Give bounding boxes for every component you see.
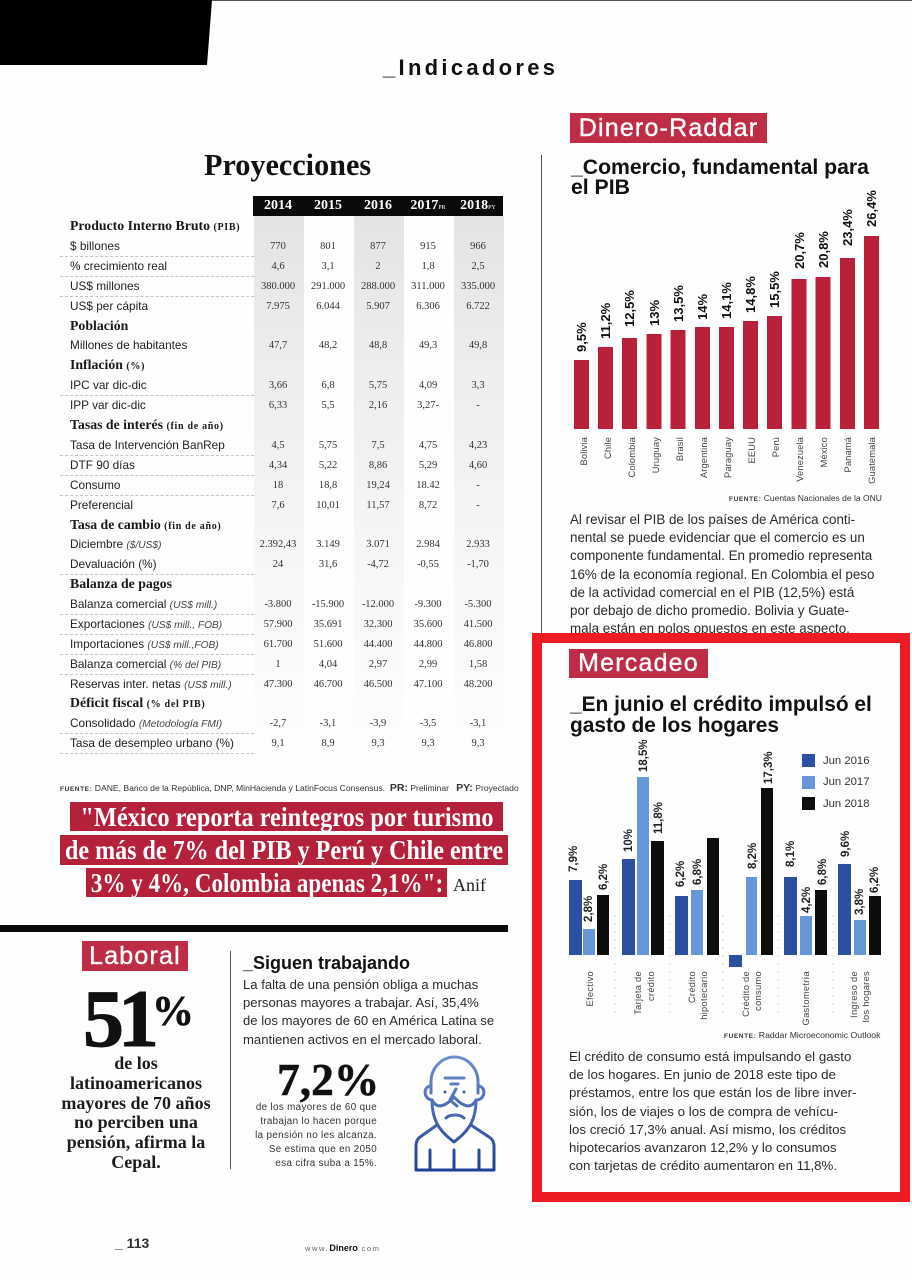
grouped bar chart: household spending: 2,8% xyxy=(583,896,595,922)
panel: projections table: 3.071 xyxy=(366,539,390,550)
panel: projections table: 6.722 xyxy=(466,301,490,312)
panel: projections table: 18,8 xyxy=(319,480,337,491)
text: commerce paragraph: nental se puede evidenciar que el comercio es un xyxy=(570,530,865,545)
panel: projections table: 877 xyxy=(370,241,386,252)
panel: projections table: 32.300 xyxy=(364,619,392,630)
bar chart: commerce share of GDP: 14,8% xyxy=(743,276,758,313)
text: credit paragraph: préstamos, entre los que están los de libre inver- xyxy=(569,1085,857,1100)
panel: projections table: Inflación (%) xyxy=(70,357,145,372)
bar chart: commerce share of GDP: 20,7% xyxy=(792,232,807,269)
chart legend: Jun 2017 xyxy=(823,776,869,788)
text: pension statement xyxy=(61,1053,211,1172)
bar chart: commerce share of GDP: 13% xyxy=(647,300,662,326)
panel: projections table: 7,6 xyxy=(271,500,285,511)
table source note: FUENTE: DANE, Banco de la República, DNP, MinHacienda y LatinFocus Consensus. PR: Preliminar PY: Proyectado xyxy=(60,782,519,794)
table header years: 2015 xyxy=(314,198,342,213)
bar chart: commerce share of GDP: Guatemala xyxy=(867,436,877,484)
bar chart: commerce share of GDP: Colombia xyxy=(627,436,637,477)
panel: projections table: 1,58 xyxy=(469,659,487,670)
grouped bar chart: household spending: 6,8% xyxy=(817,859,829,885)
bar chart: commerce share of GDP: 15,5% xyxy=(767,271,782,308)
table header years: 2016 xyxy=(364,198,392,213)
panel: projections table: 3,1 xyxy=(321,261,335,272)
panel: projections table: 4,34 xyxy=(269,460,287,471)
bar chart: commerce share of GDP: 20,8% xyxy=(816,231,831,268)
panel: projections table: 6,8 xyxy=(321,380,335,391)
panel: projections table: US$ millones xyxy=(70,279,140,293)
panel: projections table: 6.044 xyxy=(316,301,340,312)
text: 7,2% detail: esa cifra suba a 15%. xyxy=(275,1158,377,1169)
grouped bar chart: household spending: los hogares xyxy=(861,971,871,1022)
panel: projections table: 35.600 xyxy=(414,619,442,630)
panel: projections table: 18 xyxy=(273,480,283,491)
heading: Siguen trabajando: _Siguen trabajando xyxy=(243,953,410,973)
panel: projections table: 6,33 xyxy=(269,400,287,411)
panel: projections table: Exportaciones (US$ mill., FOB) xyxy=(70,617,222,631)
panel: projections table: 4,5 xyxy=(271,440,285,451)
panel: projections table: Preferencial xyxy=(70,498,133,512)
panel: projections table: 3,66 xyxy=(269,380,287,391)
panel: projections table: 2,99 xyxy=(419,659,437,670)
grouped bar chart: household spending: hipotecario xyxy=(699,971,709,1020)
website footer: www.Dinero.com xyxy=(305,1243,380,1253)
panel: projections table: Déficit fiscal (% del PIB) xyxy=(70,695,205,710)
panel: projections table: 31,6 xyxy=(319,559,337,570)
panel: projections table: 48,2 xyxy=(319,340,337,351)
text: 7,2% detail: de los mayores de 60 que xyxy=(256,1102,377,1113)
bar chart: commerce share of GDP xyxy=(574,190,879,484)
grouped bar chart: household spending: Efectivo xyxy=(585,971,595,1006)
big stat: 7,2%: 7,2% xyxy=(277,1054,379,1105)
grouped bar chart: household spending: consumo xyxy=(753,971,763,1011)
panel: projections table: 4,04 xyxy=(319,659,337,670)
panel: projections table: 61.700 xyxy=(264,639,292,650)
text: credit paragraph: con tarjetas de crédito aumentaron en 11,8%. xyxy=(569,1158,837,1173)
bar chart: commerce share of GDP: 14% xyxy=(695,294,710,320)
bar chart: commerce share of GDP: Venezuela xyxy=(795,436,805,482)
panel: projections table: 4,60 xyxy=(469,460,487,471)
panel: projections table: 9,1 xyxy=(271,738,285,749)
panel: projections table: Producto Interno Bruto (PIB) xyxy=(70,218,240,233)
bar chart: commerce share of GDP: México xyxy=(819,437,829,467)
section title: Indicadores: _Indicadores xyxy=(383,55,558,80)
panel: projections table: - xyxy=(476,480,480,491)
panel: projections table: -3.800 xyxy=(264,599,292,610)
panel: projections table: 5,5 xyxy=(321,400,335,411)
panel: projections table: 2.984 xyxy=(416,539,440,550)
panel: projections table: Devaluación (%) xyxy=(70,557,157,571)
panel: projections table: 801 xyxy=(320,241,336,252)
text: credit paragraph: los creció 17,3% anual. Así mismo, los créditos xyxy=(569,1122,846,1137)
panel: projections table: 2,5 xyxy=(471,261,485,272)
text: commerce paragraph: componente fundamental. En promedio representa xyxy=(570,548,872,563)
text: pension statement: de los xyxy=(114,1053,158,1073)
bar chart: commerce share of GDP: EEUU xyxy=(747,437,757,463)
grouped bar chart: household spending: 11,8% xyxy=(653,802,665,834)
text: 7,2% detail: la pensión no les alcanza. xyxy=(255,1130,377,1141)
panel: projections table: -3,1 xyxy=(470,718,486,729)
chart legend: Jun 2018 xyxy=(823,798,869,810)
panel: projections table: 8,72 xyxy=(419,500,437,511)
pull quote: Anif xyxy=(453,875,486,895)
heading: Proyecciones: Proyecciones xyxy=(204,148,371,182)
bar chart: commerce share of GDP: 26,4% xyxy=(864,190,879,227)
panel: projections table: -3,9 xyxy=(370,718,386,729)
panel: projections table: US$ per cápita xyxy=(70,299,148,313)
grouped bar chart: household spending: 8,2% xyxy=(747,843,759,869)
panel: projections table: 2.392,43 xyxy=(260,539,296,550)
panel: projections table: -5.300 xyxy=(464,599,492,610)
table header years xyxy=(253,196,503,216)
heading: Comercio: _Comercio, fundamental para xyxy=(571,156,869,179)
grouped bar chart: household spending: 6,2% xyxy=(675,861,687,887)
grouped bar chart: household spending: 6,2% xyxy=(869,867,881,893)
tag: Mercadeo: Mercadeo xyxy=(578,649,699,677)
panel: projections table: Tasa de desempleo urbano (%) xyxy=(70,736,234,750)
panel: projections table: -2,7 xyxy=(270,718,286,729)
grouped bar chart: household spending: Crédito xyxy=(687,971,697,1003)
text: Siguen trabajando body: La falta de una pensión obliga a muchas xyxy=(243,977,478,992)
panel: projections table: 10,01 xyxy=(316,500,340,511)
panel: projections table: 47,7 xyxy=(269,340,287,351)
bar chart: commerce share of GDP: Chile xyxy=(603,437,613,459)
bar chart: commerce share of GDP: Paraguay xyxy=(723,437,733,478)
bar chart: commerce share of GDP: 23,4% xyxy=(840,209,855,246)
text: credit paragraph: sión, los de viajes o los de compra de vehícu- xyxy=(569,1104,838,1119)
panel: projections table: Balanza de pagos xyxy=(70,576,172,591)
grouped bar chart: household spending: 6,2% xyxy=(598,864,610,890)
grouped bar chart: household spending: 4,2% xyxy=(801,887,813,913)
panel: projections table: IPC var dic-dic xyxy=(70,378,147,392)
panel: projections table: 57.900 xyxy=(264,619,292,630)
panel: projections table: 291.000 xyxy=(311,281,345,292)
panel: projections table: Población xyxy=(70,318,128,333)
panel: projections table: 915 xyxy=(420,241,436,252)
panel: projections table: Tasa de Intervención BanRep xyxy=(70,438,225,452)
panel: projections table: 7,5 xyxy=(371,440,385,451)
grouped bar chart: household spending: 8,1% xyxy=(785,841,797,867)
bar chart: commerce share of GDP: 9,5% xyxy=(574,322,589,352)
text: commerce paragraph: 16% de la economía regional. En Colombia el peso xyxy=(570,567,874,582)
bar chart: commerce share of GDP: Panamá xyxy=(843,436,853,473)
chart legend: Jun 2016 xyxy=(823,755,869,767)
big stat: 51%: 51 xyxy=(83,973,153,1064)
panel: projections table: Reservas inter. netas (US$ mill.) xyxy=(70,677,232,691)
panel: projections table: -1,70 xyxy=(467,559,489,570)
table header years: 2017PR xyxy=(410,198,446,213)
panel: projections table: Balanza comercial (US$ mill.) xyxy=(70,597,217,611)
grouped bar chart: household spending: 10% xyxy=(623,829,635,852)
panel: projections table: 47.300 xyxy=(264,679,292,690)
panel: projections table: 966 xyxy=(470,241,486,252)
bar chart: commerce share of GDP: Bolivia xyxy=(579,436,589,465)
section divider xyxy=(0,925,508,932)
page number: _ 113 xyxy=(115,1235,149,1251)
heading: credit: gasto de los hogares xyxy=(570,714,779,736)
grouped bar chart: household spending: 9,6% xyxy=(840,831,852,857)
chart legend xyxy=(802,754,869,810)
panel: projections table: 335.000 xyxy=(461,281,495,292)
panel: projections table: 4,09 xyxy=(419,380,437,391)
text: commerce paragraph xyxy=(570,512,874,636)
panel: projections table: 3,3 xyxy=(471,380,485,391)
bar chart: commerce share of GDP: Perú xyxy=(771,437,781,457)
panel: projections table: 18.42 xyxy=(416,480,440,491)
bar chart: commerce share of GDP: 11,2% xyxy=(598,302,613,339)
panel: projections table: DTF 90 días xyxy=(70,458,135,472)
text: credit paragraph: de los hogares. En junio de 2018 este tipo de xyxy=(569,1067,836,1082)
panel: projections table: 4,23 xyxy=(469,440,487,451)
panel: projections table: -4,72 xyxy=(367,559,389,570)
grouped bar chart: household spending: 17,3% xyxy=(763,751,775,784)
table header years: 2014 xyxy=(264,198,292,213)
panel: projections table: Millones de habitantes xyxy=(70,338,187,352)
panel: projections table: 19,24 xyxy=(366,480,390,491)
text: Siguen trabajando body: de los mayores de 60 en América Latina se xyxy=(243,1013,494,1028)
panel: projections table: 4,75 xyxy=(419,440,437,451)
panel: projections table: 41.500 xyxy=(464,619,492,630)
panel: projections table: 5,75 xyxy=(319,440,337,451)
grouped bar chart: household spending: 3,8% xyxy=(854,889,866,915)
grouped bar chart: household spending: crédito xyxy=(646,971,656,1001)
bar chart: commerce share of GDP: 14,1% xyxy=(719,282,734,319)
grouped bar chart: household spending: 18,5% xyxy=(638,740,650,772)
grouped bar chart: household spending: Gastometría xyxy=(801,970,811,1025)
text: pension statement: pensión, afirma la xyxy=(67,1132,205,1152)
grouped bar chart: household spending: Ingreso de xyxy=(849,971,859,1018)
panel: projections table: 5,22 xyxy=(319,460,337,471)
text: Siguen trabajando body: personas mayores a trabajar. Así, 35,4% xyxy=(243,995,479,1010)
panel divider xyxy=(541,155,542,633)
panel: projections table: Tasa de cambio (fin de año) xyxy=(70,517,221,532)
panel: projections table: -3,5 xyxy=(420,718,436,729)
big stat: 51%: % xyxy=(152,989,194,1035)
panel: projections table: 35.691 xyxy=(314,619,342,630)
text: 7,2% detail: trabajan lo hacen porque xyxy=(260,1116,377,1127)
text: commerce paragraph: de la actividad comercial en el PIB (12,5%) está xyxy=(570,585,854,600)
panel: projections table: % crecimiento real xyxy=(70,259,167,273)
panel: projections table: 288.000 xyxy=(361,281,395,292)
panel: projections table: 51.600 xyxy=(314,639,342,650)
panel: projections table: 46.700 xyxy=(314,679,342,690)
panel: projections table: 49,8 xyxy=(469,340,487,351)
panel: projections table: 9,3 xyxy=(421,738,435,749)
pull quote xyxy=(60,802,508,897)
tag: Laboral: Laboral xyxy=(89,942,181,970)
text: 7,2% detail xyxy=(255,1102,377,1169)
panel: projections table: 311.000 xyxy=(411,281,445,292)
panel: projections table: 1,8 xyxy=(421,261,435,272)
black corner shape xyxy=(0,0,912,65)
chart source: Raddar: FUENTE: Raddar Microeconomic Outlook xyxy=(724,1030,880,1040)
bar chart: commerce share of GDP: Argentina xyxy=(699,436,709,478)
panel: projections table: 4,6 xyxy=(271,261,285,272)
panel: projections table: Balanza comercial (% del PIB) xyxy=(70,657,221,671)
heading: credit: _En junio el crédito impulsó el xyxy=(570,693,872,716)
heading: Comercio: el PIB xyxy=(571,176,630,198)
text: commerce paragraph: mala están en polos opuestos en este aspecto. xyxy=(570,621,850,636)
panel: projections table: 380.000 xyxy=(261,281,295,292)
big stat: 51% xyxy=(83,973,194,1064)
panel: projections table: 5,75 xyxy=(369,380,387,391)
panel: projections table: 9,3 xyxy=(471,738,485,749)
panel: projections table: Importaciones (US$ mill.,FOB) xyxy=(70,637,219,651)
panel: projections table: Tasas de interés (fin de año) xyxy=(70,417,224,432)
panel: projections table: - xyxy=(476,500,480,511)
text: pension statement: latinoamericanos xyxy=(70,1073,202,1093)
text: pension statement: mayores de 70 años xyxy=(61,1093,211,1113)
bar chart: commerce share of GDP: Uruguay xyxy=(651,437,661,473)
panel: projections table: 5,29 xyxy=(419,460,437,471)
panel: projections table: -9.300 xyxy=(414,599,442,610)
panel: projections table: $ billones xyxy=(70,239,120,253)
column divider xyxy=(230,951,231,1169)
panel: projections table: 24 xyxy=(273,559,283,570)
panel: projections table: 48.200 xyxy=(464,679,492,690)
panel: projections table: Consumo xyxy=(70,478,120,492)
bar chart: commerce share of GDP: 13,5% xyxy=(671,285,686,322)
panel: projections table: 770 xyxy=(270,241,286,252)
grouped bar chart: household spending: Tarjeta de xyxy=(633,971,643,1015)
panel: projections table: 48,8 xyxy=(369,340,387,351)
panel: projections table: -0,55 xyxy=(417,559,439,570)
grouped bar chart: household spending xyxy=(568,740,881,1025)
text: credit paragraph: El crédito de consumo está impulsando el gasto xyxy=(569,1049,851,1064)
panel: projections table: - xyxy=(476,400,480,411)
panel: projections table: -3,1 xyxy=(320,718,336,729)
text: pension statement: Cepal. xyxy=(111,1152,161,1172)
text: Siguen trabajando body xyxy=(243,977,494,1047)
panel: projections table: 47.100 xyxy=(414,679,442,690)
panel: projections table: 44.400 xyxy=(364,639,392,650)
panel: projections table: 7.975 xyxy=(266,301,290,312)
text: commerce paragraph: Al revisar el PIB de los países de América conti- xyxy=(570,512,855,527)
text: credit paragraph xyxy=(569,1049,857,1173)
panel: projections table: 6.306 xyxy=(416,301,440,312)
bar chart: commerce share of GDP: Brasil xyxy=(675,437,685,461)
panel: projections table: 3,27- xyxy=(417,400,439,411)
grouped bar chart: household spending: Crédito de xyxy=(741,971,751,1017)
panel: projections table: 5.907 xyxy=(366,301,390,312)
text: commerce paragraph: por debajo de dicho promedio. Bolivia y Guate- xyxy=(570,603,849,618)
panel: projections table: Consolidado (Metodología FMI) xyxy=(70,716,222,730)
grouped bar chart: household spending: 6,8% xyxy=(692,859,704,885)
tag: Dinero-Raddar: Dinero-Raddar xyxy=(579,114,758,142)
panel: projections table: -12.000 xyxy=(362,599,394,610)
panel: projections table: 2 xyxy=(375,261,381,272)
heading: Comercio xyxy=(570,156,870,198)
panel: projections table: 8,86 xyxy=(369,460,387,471)
panel: projections table: IPP var dic-dic xyxy=(70,398,146,412)
panel: projections table: 1 xyxy=(275,659,281,670)
bar chart: commerce share of GDP: 12,5% xyxy=(622,290,637,327)
icon: bearded older man xyxy=(414,1056,496,1172)
text: credit paragraph: hipotecarios avanzaron 12,2% y lo consumos xyxy=(569,1140,837,1155)
panel: projections table: 9,3 xyxy=(371,738,385,749)
panel: projections table: 44.800 xyxy=(414,639,442,650)
panel: projections table: 3.149 xyxy=(316,539,340,550)
text: pension statement: no perciben una xyxy=(74,1112,198,1132)
panel: projections table: 2,16 xyxy=(369,400,387,411)
panel: projections table: -15.900 xyxy=(312,599,344,610)
panel: projections table: Diciembre ($/US$) xyxy=(70,537,162,551)
panel: projections table xyxy=(60,196,504,754)
panel: projections table: 46.500 xyxy=(364,679,392,690)
grouped bar chart: household spending: 7,9% xyxy=(568,846,580,872)
panel: projections table: 46.800 xyxy=(464,639,492,650)
text: 7,2% detail: Se estima que en 2050 xyxy=(269,1144,377,1155)
panel: projections table: 8,9 xyxy=(321,738,335,749)
panel: projections table: 2.933 xyxy=(466,539,490,550)
panel: projections table: 2,97 xyxy=(369,659,387,670)
table header years: 2018PY xyxy=(460,198,496,213)
panel: projections table: 11,57 xyxy=(366,500,390,511)
panel: projections table: 49,3 xyxy=(419,340,437,351)
heading: credit xyxy=(570,693,872,736)
panel: Mercadeo frame xyxy=(532,633,910,1202)
text: Siguen trabajando body: mantienen activos en el mercado laboral. xyxy=(243,1032,482,1047)
chart source: ONU: FUENTE: Cuentas Nacionales de la ONU xyxy=(729,493,882,503)
